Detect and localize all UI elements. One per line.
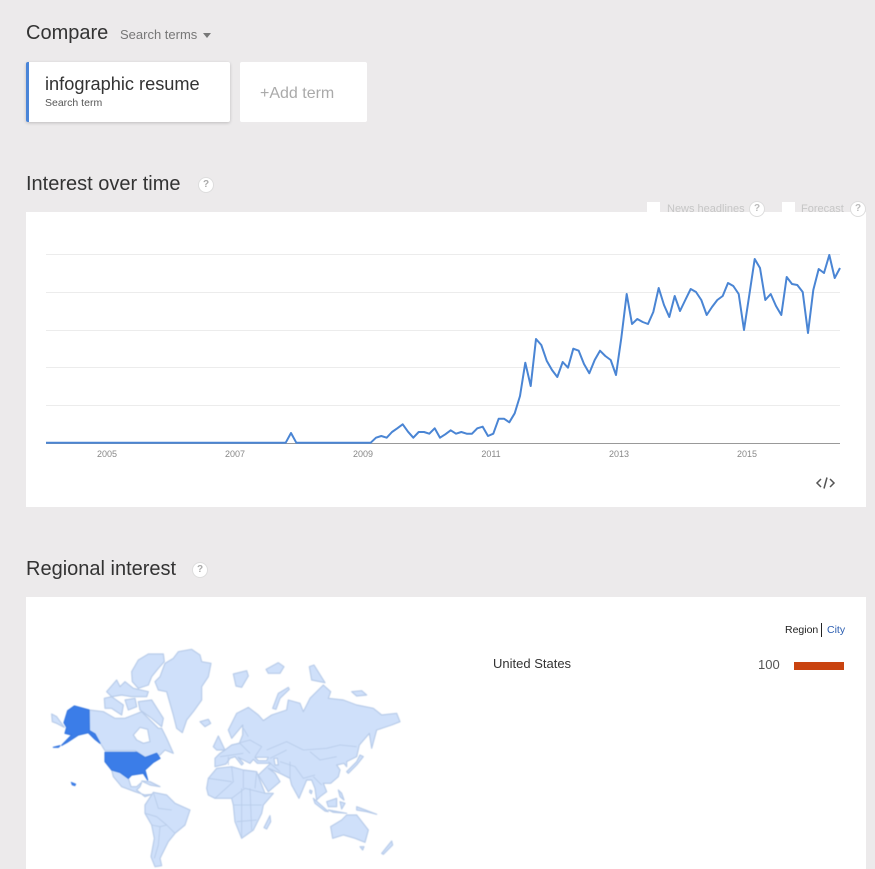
americas south (105, 752, 190, 867)
region bar (794, 662, 844, 670)
panel: interest over time (26, 212, 866, 507)
term caption: Search term (45, 97, 102, 109)
add term label: +Add term (260, 85, 334, 102)
region value: 100 (758, 657, 780, 672)
year labels: 2009 (353, 449, 373, 459)
heading: Regional interest: Regional interest (26, 558, 176, 580)
toggle: region or city (785, 623, 846, 637)
contiguous united states (105, 752, 160, 780)
alaska (62, 706, 100, 745)
africa (207, 752, 393, 854)
year labels (97, 449, 757, 459)
option: forecast (782, 201, 866, 217)
heading: Compare: Compare (26, 22, 108, 44)
year labels: 2011 (481, 449, 501, 459)
option: news headlines: ? (754, 203, 760, 214)
year labels: 2015 (737, 449, 757, 459)
year labels: 2013 (609, 449, 629, 459)
option: forecast: ? (855, 203, 861, 214)
eurasia, africa and oceania (207, 663, 400, 854)
borders (208, 752, 337, 838)
icon: help: ? (197, 564, 203, 575)
icon: embed code (816, 477, 835, 489)
heading: Interest over time: Interest over time (26, 173, 181, 195)
year labels: 2005 (97, 449, 117, 459)
hawaii (71, 782, 76, 786)
option: news headlines: News headlines (667, 203, 745, 215)
toggle: region or city: City (827, 624, 845, 636)
dropdown: Search terms: Search terms (120, 27, 197, 42)
card: add term (240, 62, 367, 122)
option: forecast: Forecast (801, 203, 844, 215)
toggle: region or city: Region (785, 624, 818, 636)
year labels: 2007 (225, 449, 245, 459)
term name: infographic resume (45, 74, 200, 94)
card: search term (26, 62, 230, 122)
icon: help (198, 177, 214, 193)
line chart: interest over time (46, 254, 841, 459)
eurasia mainland (215, 685, 400, 800)
region name: United States (493, 656, 571, 671)
north america north of the united states (52, 649, 211, 757)
option: news headlines (647, 201, 765, 217)
icon: help: ? (203, 179, 209, 190)
region row: united states (493, 656, 844, 672)
icon: help (192, 562, 208, 578)
data line (46, 255, 840, 443)
panel: regional interest (26, 597, 866, 869)
